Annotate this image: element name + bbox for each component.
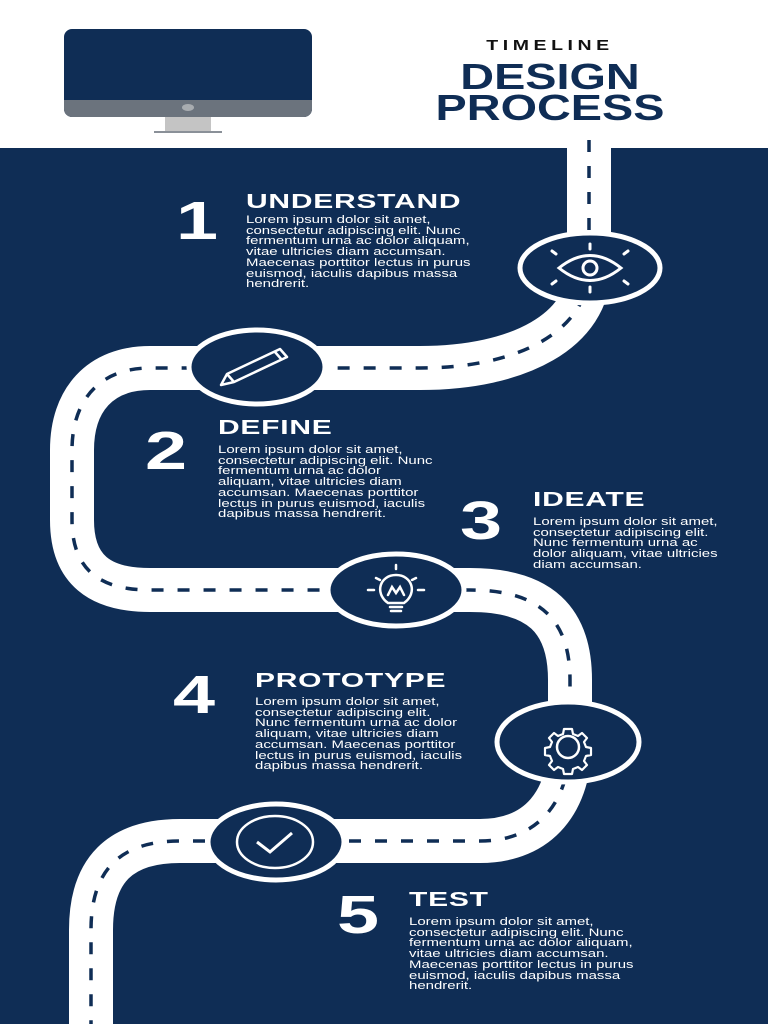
step 4: lectus in purus euismod, iaculis: [255, 750, 462, 762]
step 1: UNDERSTAND: [246, 191, 461, 213]
step 4: PROTOTYPE: [255, 670, 446, 692]
step 3: diam accumsan.: [533, 559, 642, 571]
step 4: [173, 665, 462, 772]
step 3: IDEATE: [533, 489, 645, 511]
step 1: euismod, iaculis dapibus massa: [246, 268, 457, 280]
step 2: DEFINE: [218, 417, 333, 439]
step 2: lectus in purus euismod, iaculis: [218, 498, 425, 510]
step 2: fermentum urna ac dolor: [218, 465, 381, 477]
step 5: [337, 885, 634, 992]
step 4: Nunc fermentum urna ac dolor: [255, 717, 457, 729]
step 5: 5: [337, 885, 379, 945]
step 3: Nunc fermentum urna ac: [533, 537, 698, 549]
step 1: fermentum urna ac dolor aliquam,: [246, 235, 470, 247]
step 1: Lorem ipsum dolor sit amet,: [246, 214, 431, 226]
step 1: Maecenas porttitor lectus in purus: [246, 257, 471, 269]
step 3: Lorem ipsum dolor sit amet,: [533, 516, 718, 528]
step 4: dapibus massa hendrerit.: [255, 760, 423, 772]
step 4: 4: [173, 665, 215, 725]
step 2: consectetur adipiscing elit. Nunc: [218, 455, 433, 467]
icon: gear circle: [494, 700, 642, 784]
icon: bulb circle: [330, 552, 466, 628]
icon: eye circle: [518, 232, 662, 306]
step 5: hendrerit.: [409, 980, 472, 992]
step 2: 2: [145, 421, 187, 481]
title: DESIGN: [460, 56, 640, 97]
step 3: [460, 489, 718, 571]
step 5: euismod, iaculis dapibus massa: [409, 970, 620, 982]
step 1: hendrerit.: [246, 278, 309, 290]
step 5: vitae ultricies diam accumsan.: [409, 948, 609, 960]
step 5: fermentum urna ac dolor aliquam,: [409, 937, 633, 949]
step 1: [176, 191, 471, 290]
step 1: 1: [176, 191, 218, 251]
icon: pencil circle: [186, 328, 324, 406]
step 4: Lorem ipsum dolor sit amet,: [255, 696, 440, 708]
step 3: dolor aliquam, vitae ultricies: [533, 548, 718, 560]
step 5: consectetur adipiscing elit. Nunc: [409, 927, 624, 939]
step 2: accumsan. Maecenas porttitor: [218, 487, 418, 499]
step 4: consectetur adipiscing elit.: [255, 707, 430, 719]
step 5: Maecenas porttitor lectus in purus: [409, 959, 634, 971]
title: TIMELINE: [486, 37, 614, 54]
step 3: consectetur adipiscing elit.: [533, 527, 708, 539]
step 4: accumsan. Maecenas porttitor: [255, 739, 455, 751]
icon: monitor: [64, 29, 312, 133]
title: [436, 37, 664, 128]
step 1: vitae ultricies diam accumsan.: [246, 246, 446, 258]
step 4: aliquam, vitae ultricies diam: [255, 728, 439, 740]
title: PROCESS: [436, 87, 664, 128]
step 2: Lorem ipsum dolor sit amet,: [218, 444, 403, 456]
step 2: aliquam, vitae ultricies diam: [218, 476, 402, 488]
step 3: 3: [460, 491, 502, 551]
step 5: TEST: [409, 889, 489, 911]
step 5: Lorem ipsum dolor sit amet,: [409, 916, 594, 928]
step 2: dapibus massa hendrerit.: [218, 508, 386, 520]
icon: check circle: [210, 802, 342, 882]
step 2: [145, 417, 433, 520]
step 1: consectetur adipiscing elit. Nunc: [246, 225, 461, 237]
